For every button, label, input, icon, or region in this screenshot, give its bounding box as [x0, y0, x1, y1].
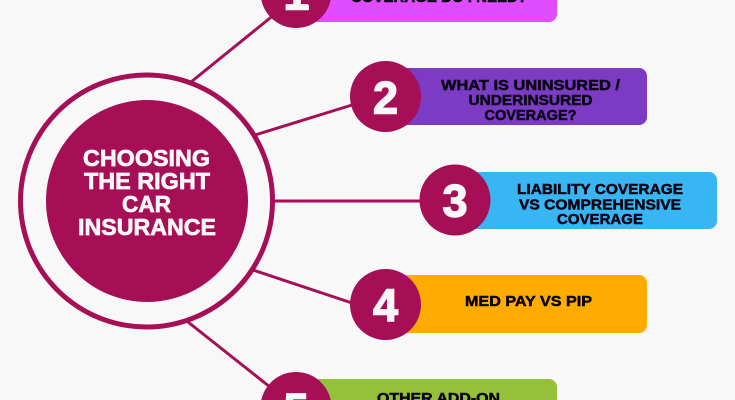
central hub	[20, 75, 272, 327]
title: INSURANCE	[78, 214, 216, 240]
item 3: VS COMPREHENSIVE	[519, 198, 681, 214]
item 4: 4	[373, 280, 398, 331]
title: CAR	[122, 191, 171, 217]
title: CHOOSING	[83, 145, 210, 171]
item 3: LIABILITY COVERAGE	[517, 182, 683, 198]
item 2: WHAT IS UNINSURED /	[441, 78, 620, 94]
item 3: COVERAGE	[557, 212, 643, 228]
item 2: 2	[373, 72, 398, 124]
item 2: COVERAGE?	[484, 108, 577, 124]
item 2	[350, 61, 647, 132]
item 4: MED PAY VS PIP	[465, 294, 592, 310]
title	[78, 145, 216, 240]
item 3: 3	[442, 176, 468, 226]
item 5	[261, 372, 557, 400]
connector lines	[188, 14, 422, 387]
item 1	[261, 0, 557, 28]
title: THE RIGHT	[84, 168, 211, 194]
item 2: UNDERINSURED	[468, 93, 592, 109]
item 4	[350, 269, 647, 340]
item 3	[420, 164, 717, 236]
